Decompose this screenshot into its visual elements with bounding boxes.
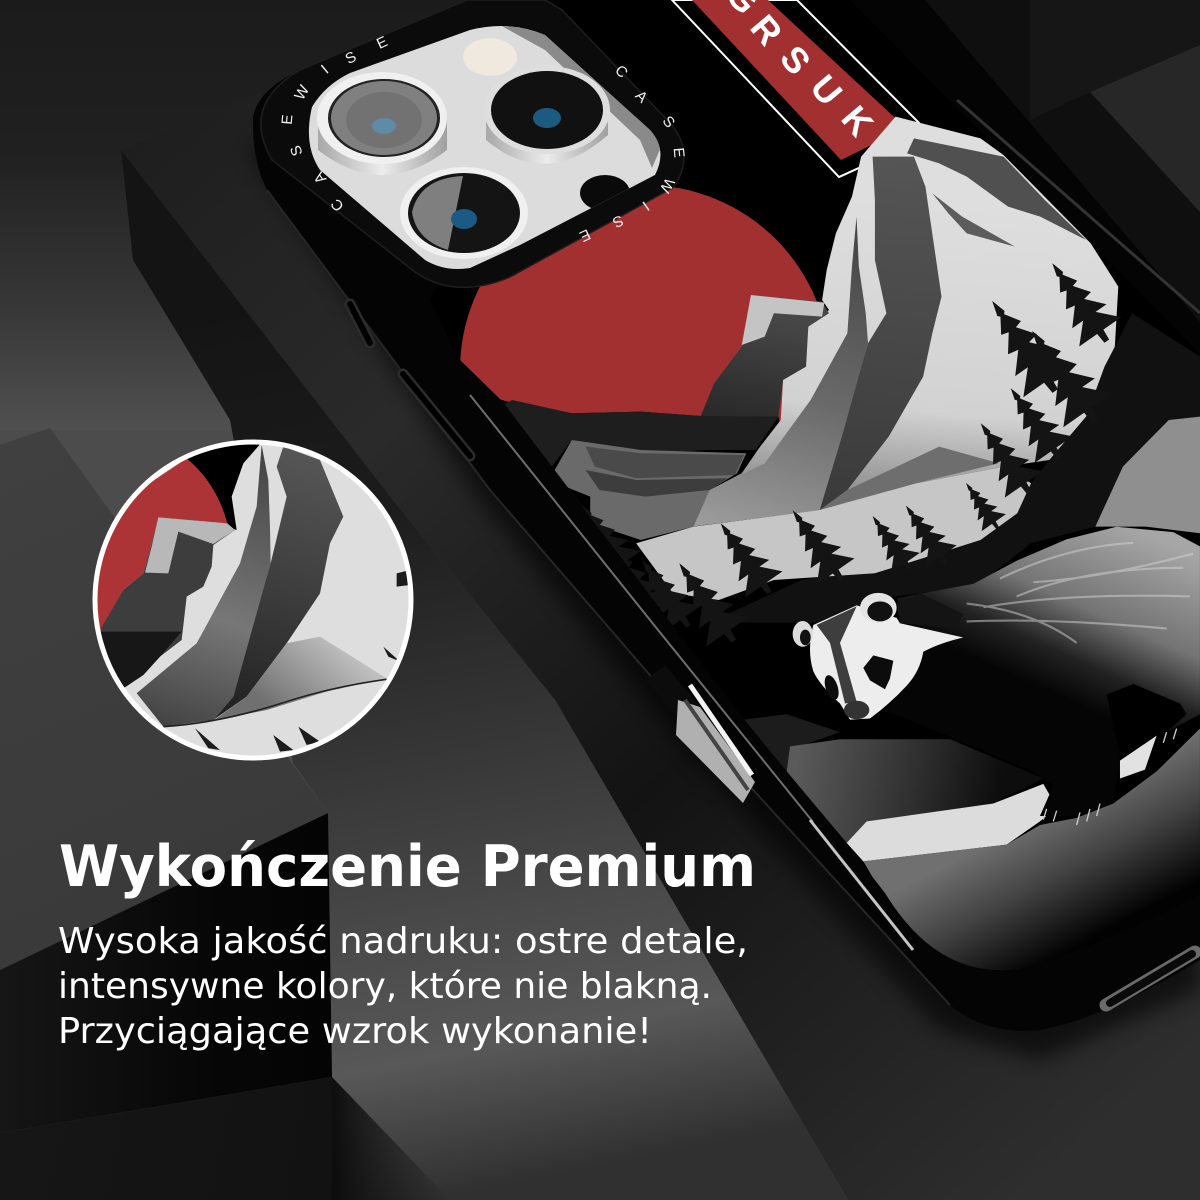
- heading: Wykończenie Premium: [59, 834, 756, 900]
- small mountain: [700, 295, 829, 417]
- zoom ridge one: [137, 445, 271, 727]
- neck stripe: [896, 594, 963, 625]
- phone shadow: [250, 120, 1200, 1060]
- ring lettering: S: [610, 211, 626, 231]
- zoom lower slope: [213, 637, 387, 721]
- upper ridge: [907, 138, 1086, 240]
- mountain snow: [691, 117, 1118, 527]
- ring lettering: A: [310, 169, 330, 187]
- ring lettering: A: [632, 87, 651, 106]
- ring lettering: E: [374, 33, 390, 53]
- front block underside: [0, 1077, 332, 1200]
- flash: [463, 38, 517, 76]
- ring lettering: I: [318, 62, 332, 77]
- body: [887, 527, 1200, 816]
- zoom red sun: [80, 458, 227, 637]
- body text: intensywne kolory, które nie blakną.: [58, 966, 712, 1007]
- middle rock: [787, 739, 1043, 843]
- ground below sun: [500, 399, 780, 555]
- snow streak: [847, 784, 1057, 861]
- lens 1: [317, 72, 447, 175]
- badger and rocks: [743, 527, 1200, 971]
- ring lettering: E: [577, 225, 593, 245]
- claws: [1043, 729, 1177, 825]
- zoom small mountain: [100, 517, 235, 688]
- zoom ridge two: [213, 447, 343, 720]
- label frame: [672, 0, 931, 177]
- phone case body: [253, 0, 1200, 1031]
- body text: Wysoka jakość nadruku: ostre detale,: [58, 921, 748, 962]
- foreground rock: [863, 729, 1200, 971]
- left ridge: [691, 217, 868, 527]
- ring lettering: E: [670, 147, 687, 158]
- charging port: [1106, 952, 1195, 1005]
- zoom black sky: [187, 437, 267, 530]
- label letters: K: [834, 98, 882, 144]
- lower meadow: [636, 467, 1031, 600]
- ring lettering: C: [611, 62, 631, 82]
- snowfield shadow: [820, 447, 999, 510]
- ring lettering: W: [291, 82, 313, 103]
- left dark rock: [743, 714, 840, 771]
- zoom ring: [95, 442, 411, 758]
- microphone: [580, 175, 630, 211]
- eyes: [824, 675, 839, 700]
- dark forest mass: [710, 313, 1200, 623]
- head: [810, 605, 963, 720]
- side highlight: [470, 395, 813, 822]
- landscape: [480, 117, 1200, 623]
- back right block: [900, 0, 1200, 400]
- ear right: [860, 593, 897, 623]
- shadow beside front block: [332, 1077, 450, 1200]
- right rock: [1095, 417, 1200, 533]
- lens 2: [484, 66, 610, 164]
- body text: Przyciągające wzrok wykonanie!: [58, 1011, 652, 1052]
- red sun: [460, 185, 830, 555]
- label letters: U: [803, 67, 851, 113]
- side buttons: [350, 304, 470, 456]
- ring lettering: S: [659, 113, 678, 131]
- ring lettering: I: [639, 198, 652, 214]
- layered strata: [549, 440, 746, 540]
- ring lettering: S: [287, 143, 306, 158]
- ring lettering: S: [342, 48, 359, 68]
- face stripe: [817, 606, 857, 704]
- zoom detail circle: [80, 437, 411, 758]
- ring lettering: [279, 33, 687, 245]
- nose: [844, 701, 869, 719]
- lens 3: [400, 167, 528, 259]
- front block top face: [0, 428, 328, 970]
- zoom trees: [195, 570, 410, 752]
- tree clusters: [565, 249, 1128, 656]
- body text: [58, 921, 748, 1052]
- ring lettering: C: [327, 195, 348, 215]
- label letters: S: [772, 38, 819, 82]
- ring lettering: E: [279, 114, 296, 125]
- ring lettering: W: [656, 175, 678, 196]
- printed artwork: [460, 0, 1200, 970]
- ear left: [793, 621, 813, 647]
- label letters: R: [743, 7, 791, 53]
- dark foreground ridge: [504, 400, 778, 466]
- camera island: [261, 0, 690, 290]
- large pedestal front face: [121, 150, 848, 1200]
- front block side: [0, 813, 332, 1133]
- main ridge: [820, 157, 941, 510]
- label letters: [730, 0, 874, 139]
- camera glass window: [308, 26, 660, 269]
- chrome side button: [645, 665, 700, 743]
- fur streaks: [967, 543, 1193, 643]
